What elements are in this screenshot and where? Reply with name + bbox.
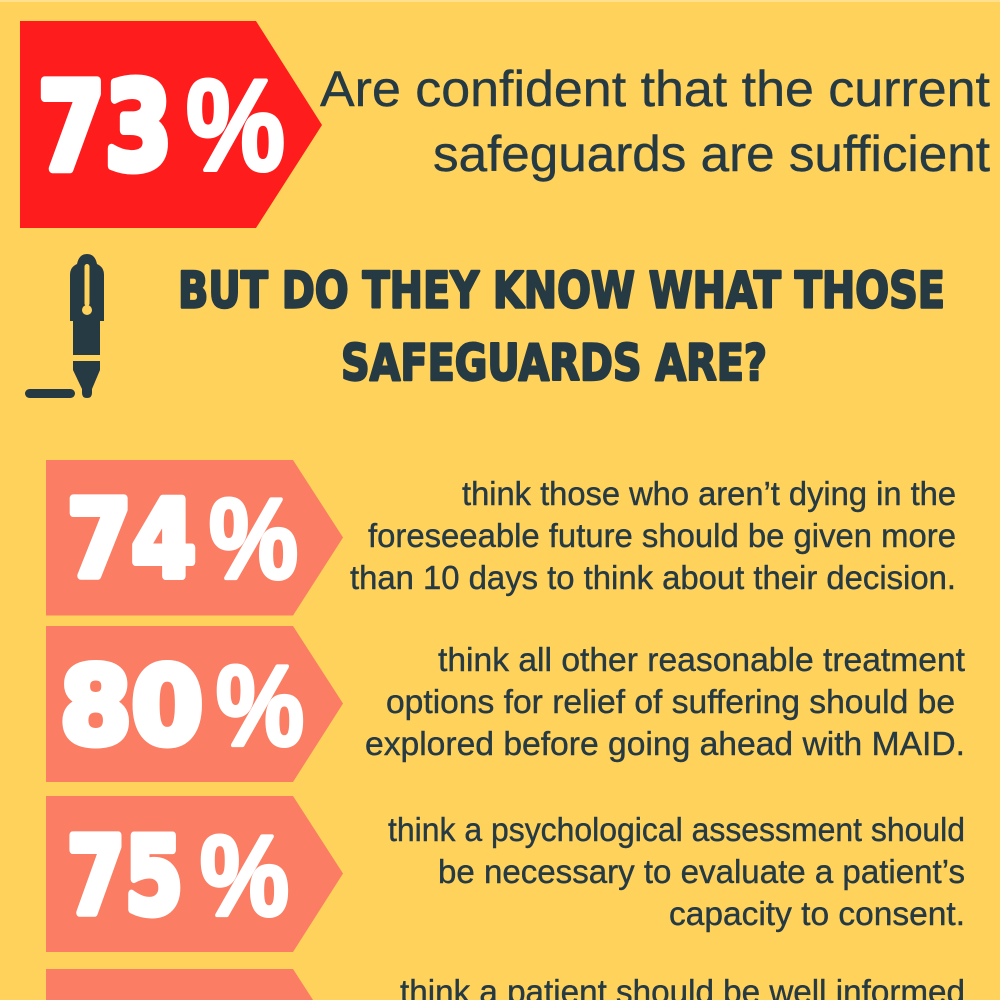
heading: but do they know: SAFEGUARDS ARE? xyxy=(341,334,767,392)
number: 73%: 73 xyxy=(38,58,172,198)
panel: 80 percent xyxy=(46,626,965,782)
number: 80% xyxy=(60,643,304,770)
text: psychological assessment xyxy=(388,811,965,932)
number: 74%: % xyxy=(209,476,298,603)
panel: fourth statement, cropped xyxy=(46,969,965,1000)
number: 73%: % xyxy=(186,52,285,198)
text: confidence statement: safeguards are sufficient xyxy=(433,126,990,182)
text: more time to decide: think those who aren’t dying in the xyxy=(462,475,956,512)
text: more time to decide: than 10 days to think about their decision. xyxy=(350,559,956,596)
text: explore other treatment: explored before going ahead with MAID. xyxy=(365,725,965,762)
text: psychological assessment: think a psychological assessment should xyxy=(388,811,965,848)
text: explore other treatment: think all other reasonable treatment xyxy=(438,641,965,678)
number: 74%: 74 xyxy=(67,478,196,601)
number: 73% xyxy=(38,52,285,198)
callout: 73 percent confident xyxy=(20,21,990,228)
number: 75%: % xyxy=(200,813,289,940)
number: 75% xyxy=(67,813,289,940)
number: 74% xyxy=(67,476,298,603)
text: more time to decide xyxy=(350,475,956,596)
text: psychological assessment: be necessary to evaluate a patient’s xyxy=(438,853,965,890)
text: psychological assessment: capacity to consent. xyxy=(669,895,965,932)
panel: 75 percent xyxy=(46,796,965,952)
text: more time to decide: foreseeable future should be given more xyxy=(368,517,956,554)
text: explore other treatment: options for relief of suffering should be xyxy=(386,683,955,720)
number: 80%: 80 xyxy=(60,645,203,768)
arrow tag xyxy=(46,460,343,616)
arrow tag xyxy=(46,626,343,782)
number: 75%: 75 xyxy=(67,815,183,938)
text: confidence statement: Are confident that the current xyxy=(320,61,990,117)
icon: fountain pen xyxy=(25,254,104,398)
heading: but do they know xyxy=(178,262,945,392)
panel: 74 percent xyxy=(46,460,956,616)
arrow tag xyxy=(46,969,313,1000)
text: explore other treatment xyxy=(365,641,965,762)
text: confidence statement xyxy=(320,61,990,182)
number: 80%: % xyxy=(216,643,304,770)
red arrow tag xyxy=(20,21,322,228)
arrow tag xyxy=(46,796,343,952)
